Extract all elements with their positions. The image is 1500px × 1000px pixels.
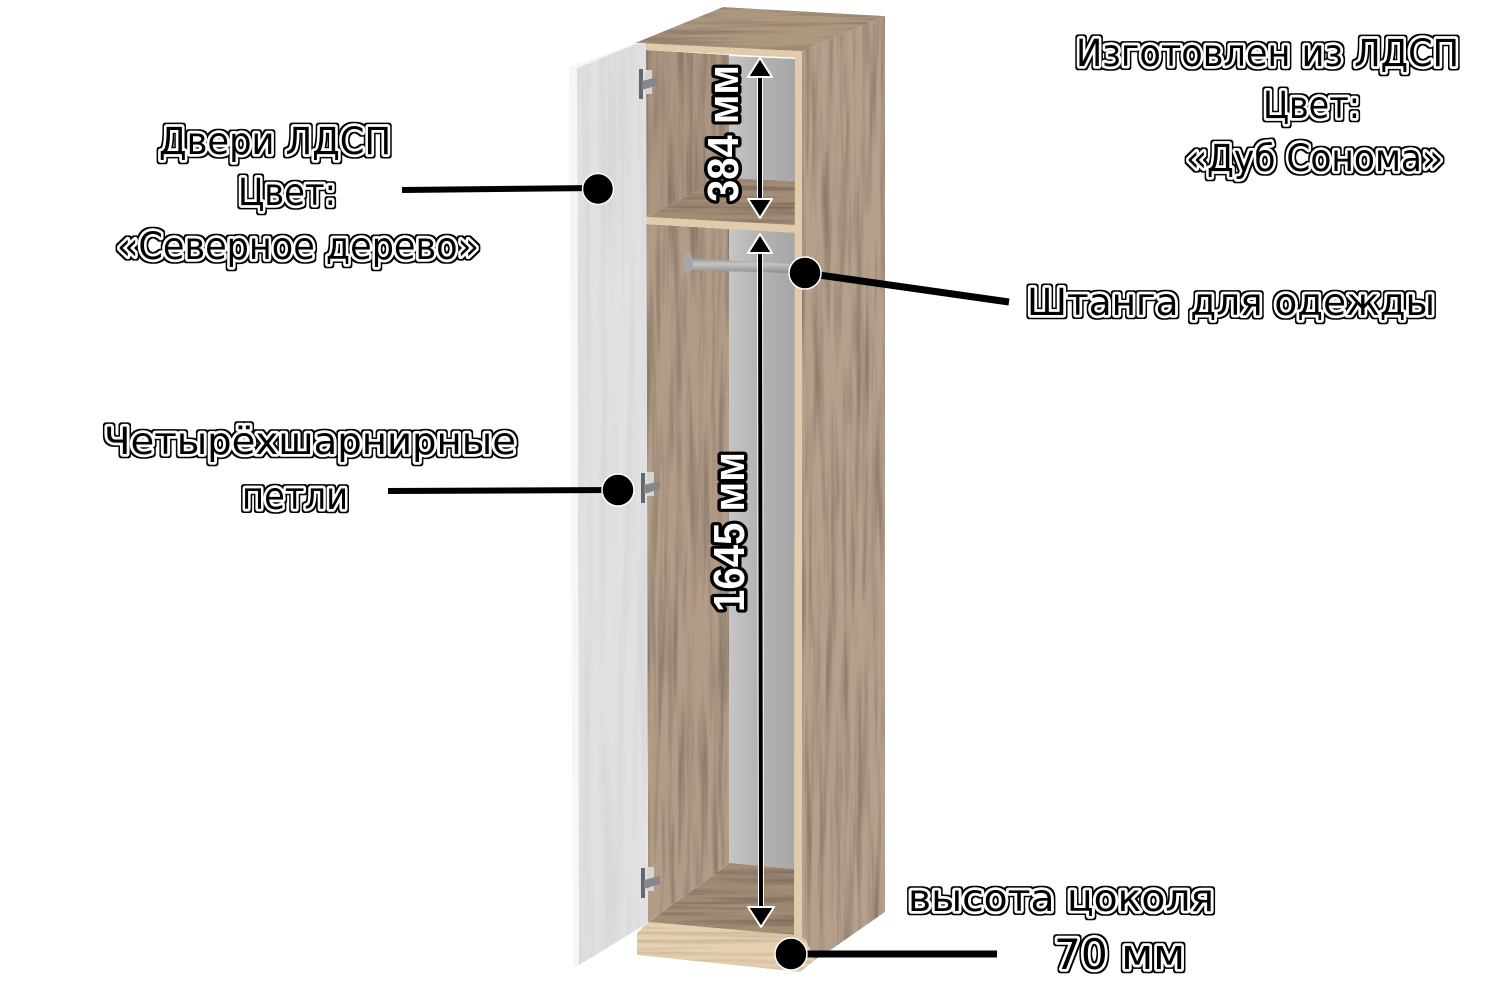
label: plinth height: высота цоколя [908, 877, 1214, 920]
dimension arrow: 384 mm [748, 58, 772, 218]
label: door material: «Северное дерево» [117, 225, 479, 268]
door [569, 43, 648, 966]
label: plinth height: 70 мм [1054, 930, 1185, 979]
wardrobe top panel [635, 7, 885, 52]
plinth [637, 922, 815, 972]
lower back wall [729, 228, 796, 870]
wardrobe right side panel [802, 16, 885, 968]
hinge bottom [641, 867, 660, 898]
shelf top surface [646, 178, 796, 226]
label: door material [117, 120, 479, 268]
dimension arrow: 1645 mm [748, 234, 774, 927]
label: clothes rail: Штанга для одежды [1027, 281, 1435, 324]
leader: hinges [388, 474, 634, 506]
hinge middle [641, 472, 660, 503]
label: door material: Двери ЛДСП [159, 120, 391, 163]
label: hinges: петли [242, 475, 348, 518]
dimension label: 384 mm: 384 мм [699, 65, 748, 202]
leader: door [402, 174, 614, 204]
label: hinges [104, 420, 516, 518]
front edge shelf [646, 217, 796, 233]
upper inner side wall [646, 50, 729, 217]
upper back wall [729, 56, 796, 182]
label: door material: Цвет: [238, 171, 336, 214]
floor surface [648, 863, 796, 936]
label: body material: Изготовлен из ЛДСП [1076, 32, 1459, 75]
leader: rail [789, 257, 1009, 302]
clothes rail [683, 252, 790, 274]
dimension label: 1645 mm: 1645 мм [705, 452, 754, 612]
label: hinges: Четырёхшарнирные [104, 420, 516, 463]
hinge top [639, 69, 658, 99]
wardrobe illustration [569, 7, 885, 972]
label: body material [1076, 32, 1459, 180]
label: body material: «Дуб Сонома» [1186, 137, 1443, 180]
leader: plinth [775, 938, 997, 970]
lower inner side wall [646, 224, 729, 922]
label: plinth height [908, 877, 1214, 979]
front edge right [794, 51, 802, 940]
label: body material: Цвет: [1263, 84, 1360, 127]
front edge top [636, 43, 802, 58]
